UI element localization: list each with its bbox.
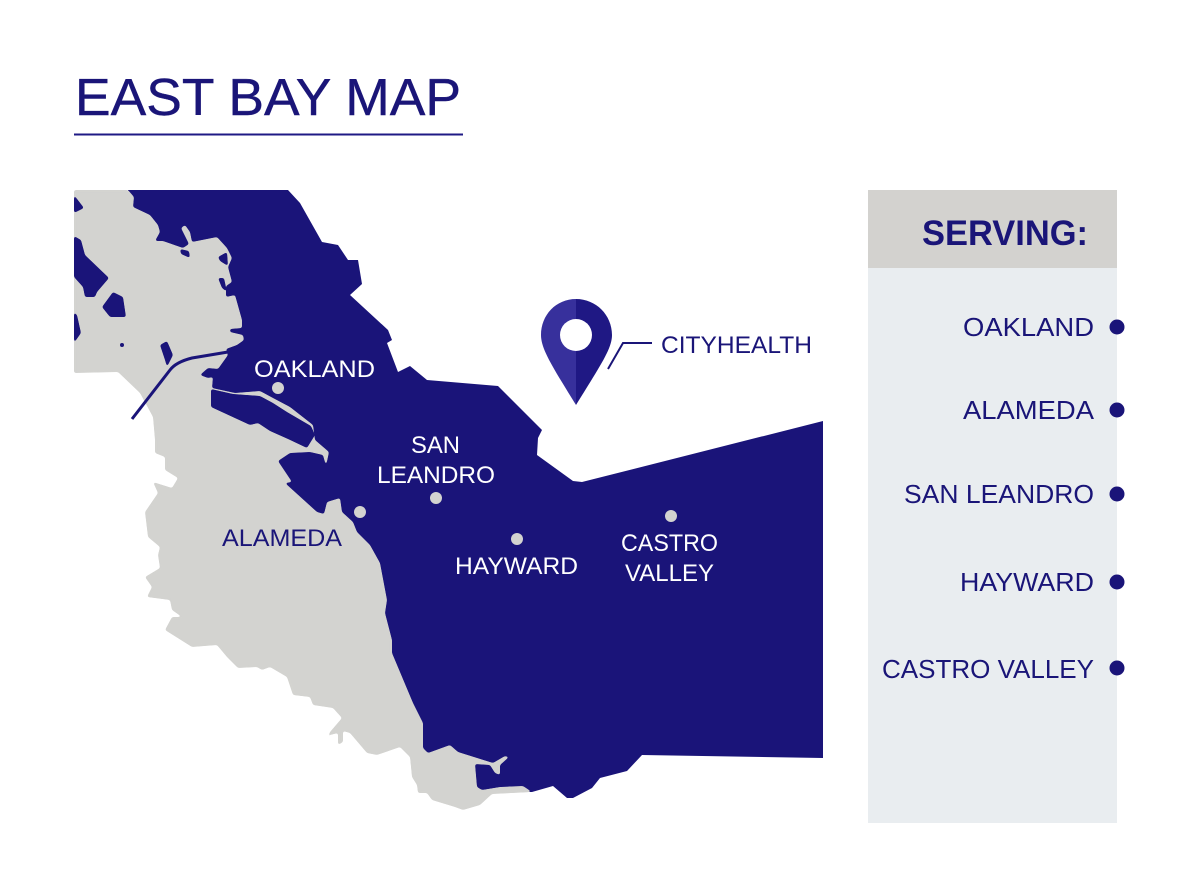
callout label: CityHealth: CITYHEALTH: [661, 332, 812, 359]
panel heading: SERVING:: [922, 214, 1088, 253]
map label: Alameda: ALAMEDA: [222, 525, 342, 552]
city marker: Hayward: [511, 533, 523, 545]
title: EAST BAY MAP: [75, 69, 461, 127]
map label: Castro Valley: [621, 530, 718, 587]
shipping channel line: [132, 352, 228, 419]
title underline: [74, 134, 463, 136]
list item: Castro Valley: CASTRO VALLEY: [882, 654, 1094, 684]
region: unserved land in grey: [74, 190, 532, 810]
map label: San Leandro: SAN: [411, 432, 460, 459]
map label: Castro Valley: CASTRO: [621, 530, 718, 557]
map: [74, 190, 823, 810]
panel background: [868, 268, 1117, 823]
list item: Alameda: ALAMEDA: [963, 395, 1095, 425]
list item: Oakland: OAKLAND: [963, 312, 1094, 342]
region: served area in navy: [128, 190, 823, 798]
water: small pond: [120, 343, 124, 347]
callout leader line: [608, 343, 652, 369]
map label: San Leandro: LEANDRO: [377, 462, 495, 489]
map label: Oakland: OAKLAND: [254, 356, 375, 383]
city marker: Alameda: [354, 506, 366, 518]
map label: Castro Valley: VALLEY: [625, 560, 714, 587]
icon: location pin: [541, 299, 612, 405]
list item: Hayward: HAYWARD: [960, 567, 1094, 597]
water: Alameda island channel: [211, 389, 315, 448]
city marker: Oakland: [272, 382, 284, 394]
city marker: San Leandro: [430, 492, 442, 504]
panel header: [868, 190, 1117, 268]
map label: San Leandro: [377, 432, 495, 489]
water: left edge inlets, bay ponds and lake: [74, 195, 228, 367]
panel: serving list: [868, 190, 1124, 823]
city marker: Castro Valley: [665, 510, 677, 522]
map label: Hayward: HAYWARD: [455, 553, 578, 580]
list item: San Leandro: SAN LEANDRO: [904, 479, 1094, 509]
